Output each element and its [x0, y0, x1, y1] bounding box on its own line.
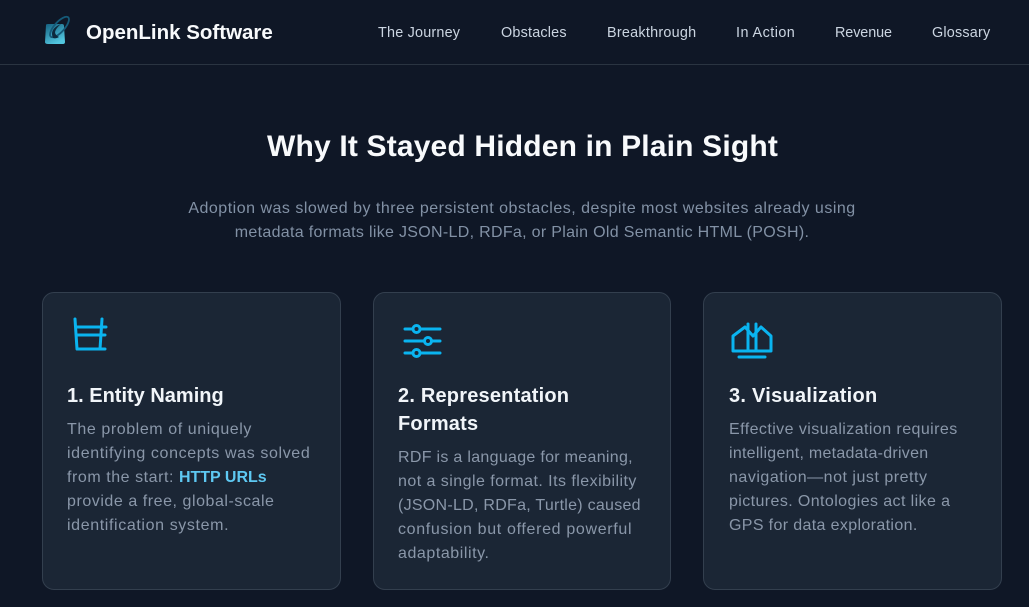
body: representation formats: RDF is a language for meaning, [398, 449, 633, 466]
body: entity naming: identification system. [67, 517, 229, 534]
heading: visualization: 3. Visualization [729, 385, 877, 407]
navigation links: Obstacles [501, 25, 567, 41]
navigation links: In Action [736, 25, 795, 41]
navigation links [378, 25, 990, 41]
panel: representation formats [373, 292, 671, 590]
icon: visualization [732, 322, 772, 358]
heading: entity naming: 1. Entity Naming [67, 385, 224, 407]
navigation links: Breakthrough [607, 25, 696, 41]
subtitle text [188, 200, 856, 241]
navigation links: Revenue [835, 25, 892, 41]
icon: entity naming [74, 318, 108, 350]
body: representation formats: confusion but offered powerful [398, 521, 632, 538]
panel: visualization [703, 292, 1002, 590]
icon: sliders [404, 324, 442, 358]
body: entity naming: from the start: HTTP URLs [67, 469, 267, 486]
heading: representation formats: Formats [398, 413, 478, 435]
body: visualization: GPS for data exploration. [729, 517, 918, 534]
subtitle text: Adoption was slowed by three persistent obstacles, despite most websites already using [188, 200, 856, 217]
panel: entity naming [42, 292, 341, 590]
heading: representation formats: 2. Representation [398, 385, 569, 407]
navigation links: The Journey [378, 25, 460, 41]
subtitle text: metadata formats like JSON-LD, RDFa, or Plain Old Semantic HTML (POSH). [235, 224, 809, 241]
heading: representation formats [398, 385, 569, 435]
body: visualization: intelligent, metadata-driven [729, 445, 928, 462]
title: Why It Stayed Hidden in Plain Sight [267, 130, 778, 163]
body: representation formats: (JSON-LD, RDFa, Turtle) caused [398, 497, 641, 514]
brand name: OpenLink Software [86, 21, 273, 44]
body: visualization: pictures. Ontologies act like a [729, 493, 950, 510]
body: visualization: navigation—not just pretty [729, 469, 928, 486]
body: visualization [729, 421, 958, 534]
body: representation formats: not a single format. Its flexibility [398, 473, 637, 490]
body: visualization: Effective visualization requires [729, 421, 958, 438]
body: entity naming: identifying concepts was solved [67, 445, 310, 462]
body: entity naming: The problem of uniquely [67, 421, 252, 438]
icon: OpenLink logo [45, 16, 70, 44]
header bar [0, 0, 1029, 65]
body: entity naming: provide a free, global-scale [67, 493, 275, 510]
navigation links: Glossary [932, 25, 990, 41]
body: representation formats: adaptability. [398, 545, 489, 562]
body: representation formats [398, 449, 641, 562]
body: entity naming [67, 421, 310, 534]
